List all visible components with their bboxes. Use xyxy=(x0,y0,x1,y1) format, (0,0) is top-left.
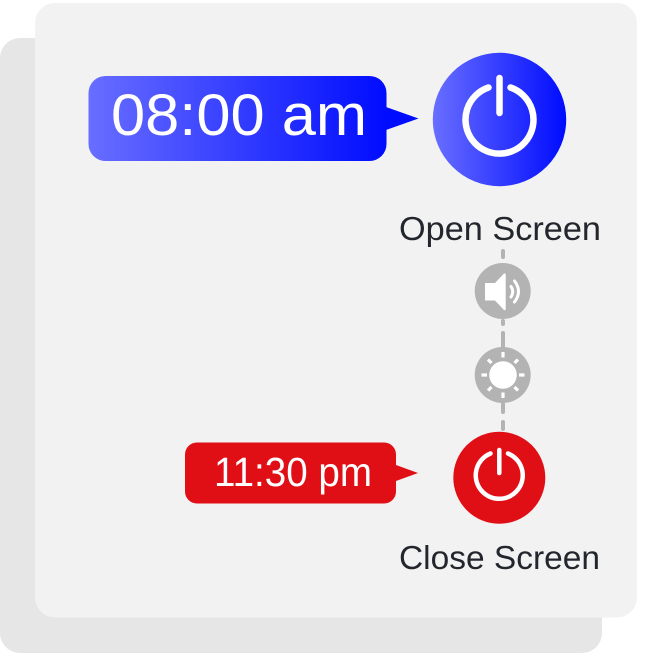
callout: opening time: 08:00 am xyxy=(111,83,367,148)
callout: closing time: 11:30 pm xyxy=(214,449,372,495)
icon: blue power button xyxy=(433,53,566,186)
callout: closing time xyxy=(185,442,418,504)
icon: speaker xyxy=(475,263,531,319)
icon: brightness sun xyxy=(475,347,531,403)
label: open screen: Open Screen xyxy=(399,210,601,247)
connector: dashed line xyxy=(501,251,505,429)
label: close screen: Close Screen xyxy=(399,539,600,576)
icon: red power button xyxy=(453,432,545,524)
callout: opening time xyxy=(88,76,418,161)
